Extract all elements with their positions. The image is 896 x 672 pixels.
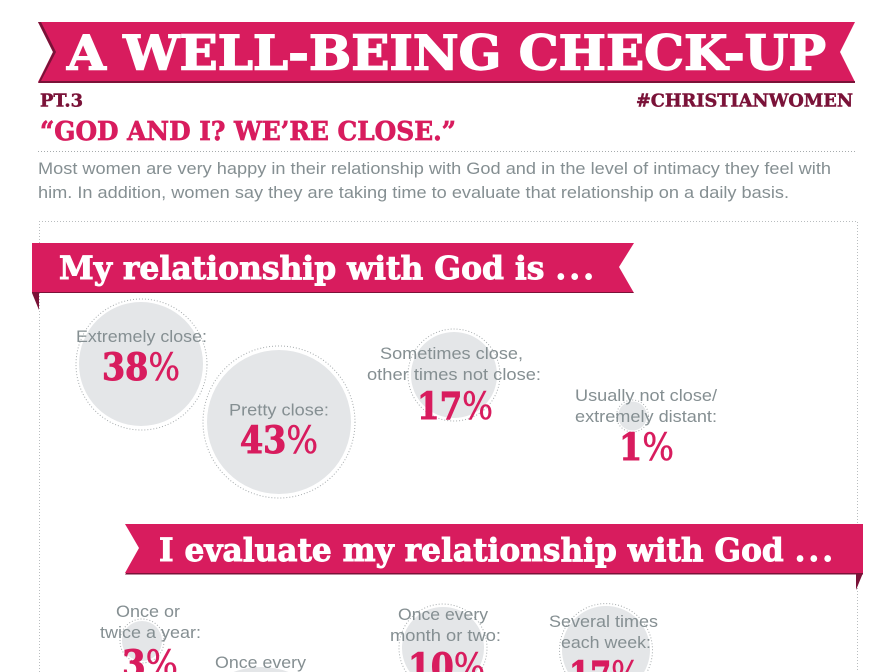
section heading: “GOD AND I? WE’RE CLOSE.”: [40, 117, 456, 147]
bubble: once every month or two 10%: Once every: [398, 605, 489, 624]
bubble: sometimes close 17%: other times not close:: [367, 365, 541, 384]
dotted content panel: [40, 222, 858, 672]
bubble: usually not close 1%: Usually not close/: [575, 386, 717, 405]
bubble: sometimes close 17%: 17%: [417, 384, 493, 428]
bubble: usually not close 1%: 1%: [619, 425, 674, 469]
intro paragraph: Most women are very happy in their relationship with God and in the level of intimacy they feel with: [38, 159, 831, 178]
bubble: extremely close 38%: [76, 299, 207, 430]
bubble: several times each week 17%: [549, 604, 658, 672]
banner: evaluate relationship: I evaluate my relationship with God ...: [159, 531, 836, 569]
bubble: once every month or two 10%: [390, 604, 501, 672]
bubble: pretty close 43%: 43%: [240, 418, 318, 462]
bubble: once every month or two 10%: month or two:: [390, 626, 501, 645]
bubble: once every (partly cropped): Once every: [215, 653, 307, 672]
bubble: several times each week 17%: each week:: [561, 633, 651, 652]
bubble: pretty close 43%: Pretty close:: [229, 400, 329, 420]
bubble: usually not close 1%: [575, 386, 717, 469]
bubble: usually not close 1%: extremely distant:: [575, 407, 717, 426]
bubble: several times each week 17%: Several times: [549, 612, 658, 631]
bubble: extremely close 38%: 38%: [102, 345, 180, 389]
banner: evaluate relationship: [125, 524, 863, 590]
intro paragraph: [38, 159, 831, 202]
bubble: sometimes close 17%: [367, 329, 541, 428]
bubble: once or twice a year 3%: Once or: [116, 602, 180, 621]
banner: relationship with God: My relationship with God is ...: [59, 249, 597, 287]
bubble: once or twice a year 3%: [100, 602, 201, 672]
bubble: extremely close 38%: Extremely close:: [76, 327, 207, 346]
bubble: sometimes close 17%: Sometimes close,: [380, 344, 523, 363]
banner: relationship with God: [32, 243, 634, 310]
bubble: once or twice a year 3%: twice a year:: [100, 623, 201, 642]
bubble: pretty close 43%: [203, 346, 355, 498]
part label: PT.3: [40, 90, 83, 112]
intro paragraph: him. In addition, women say they are taking time to evaluate that relationship on a daily basis.: [38, 183, 789, 202]
hashtag: #CHRISTIANWOMEN: [636, 90, 853, 112]
title banner: A WELL-BEING CHECK-UP: [66, 26, 826, 82]
